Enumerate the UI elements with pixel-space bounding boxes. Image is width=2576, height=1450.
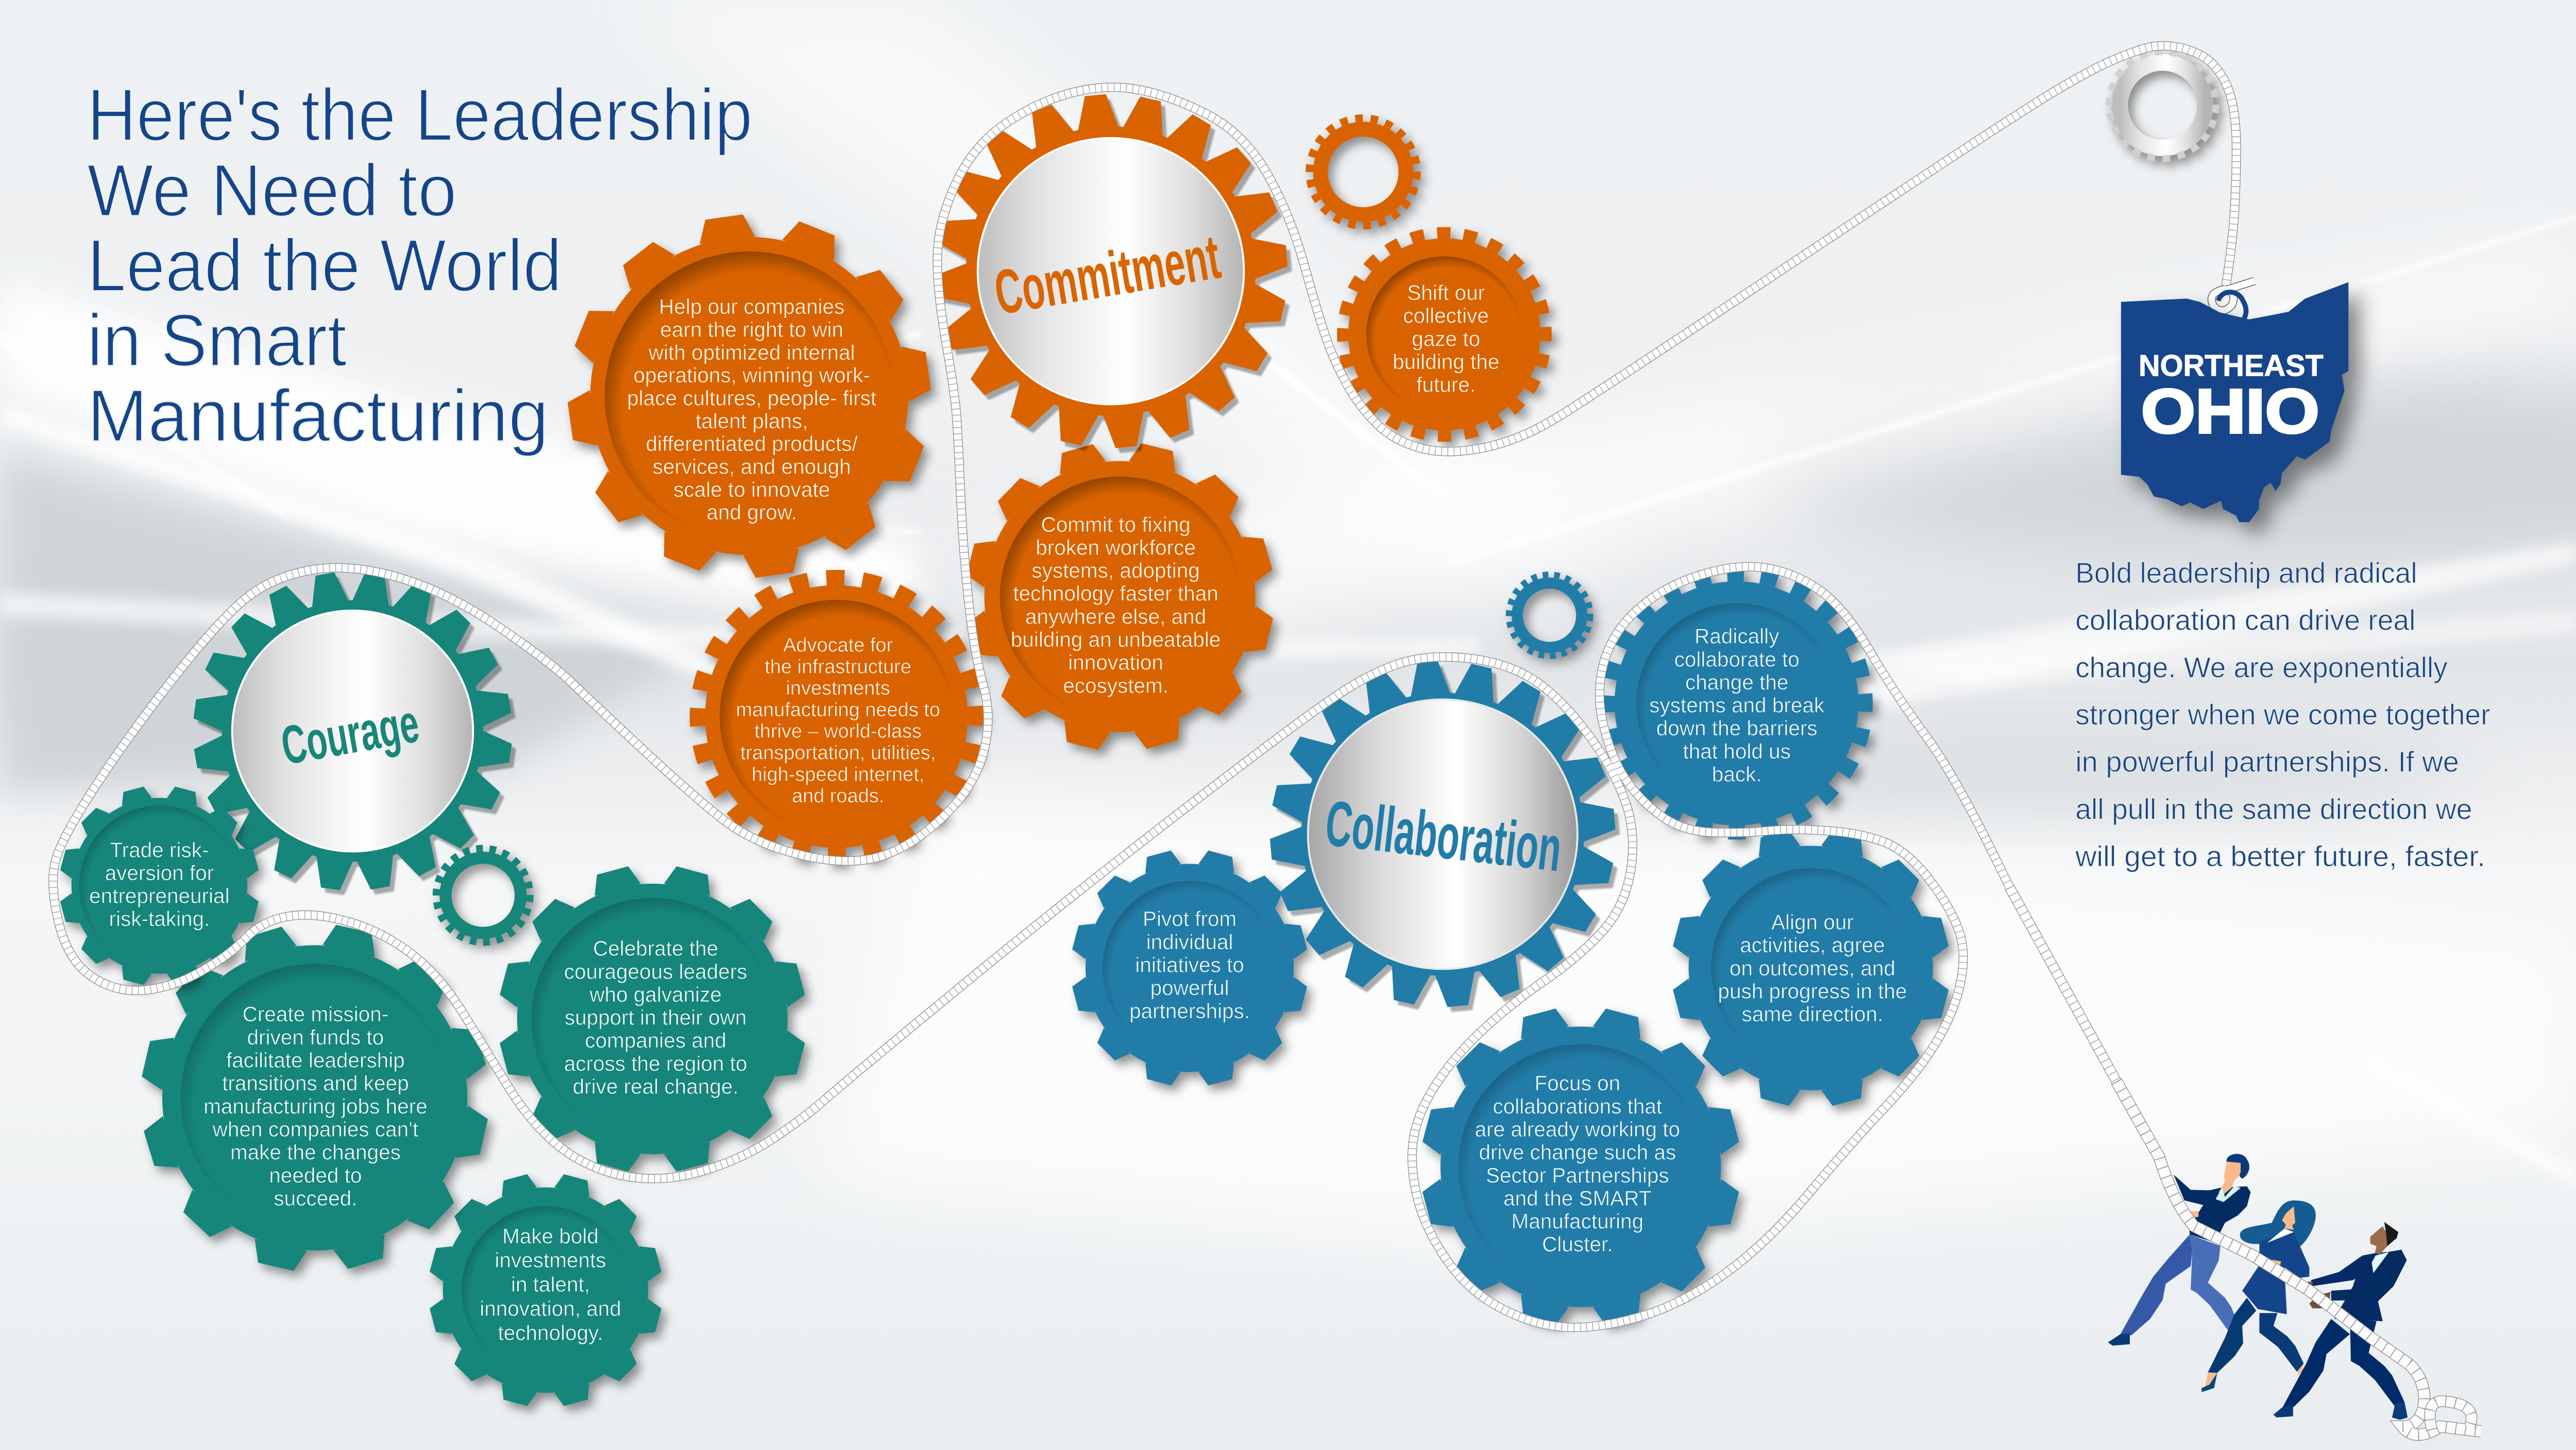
gear: collaboration [1256,647,1630,1021]
text: trade: entrepreneurial [89,884,230,908]
paragraph: change. We are exponentially [2075,651,2448,683]
pulley silver ring [2109,52,2216,159]
text: make bold: technology. [498,1321,603,1344]
text: focus: collaborations that [1493,1094,1662,1118]
text: help our companies: Help our companies [659,295,844,318]
title: Here's the Leadership [87,74,753,156]
text: celebrate: drive real change. [573,1075,739,1099]
panel: courage gears [37,551,840,1433]
text: radically: Radically [1694,625,1780,648]
text: focus: Manufacturing [1512,1209,1643,1233]
gear: pivot [1045,823,1334,1113]
Ohio shape [2121,282,2348,522]
paragraph: all pull in the same direction we [2075,793,2472,825]
text: trade: risk-taking. [109,907,210,931]
text: pivot [1129,907,1250,1023]
text: trade: aversion for [105,861,214,885]
text: shift: future. [1416,373,1476,397]
gear: courage [173,551,533,911]
gear: shift [1336,227,1552,442]
text: pivot: initiatives to [1135,953,1244,977]
text: align: Align our [1771,911,1854,934]
heading: Commitment: Commitment [990,221,1225,328]
title: We Need to [87,149,457,232]
paragraph: stronger when we come together [2075,699,2490,731]
panel: commitment gears [545,80,1552,864]
text: shift: building the [1393,350,1499,374]
text: help our companies: services, and enough [653,455,851,479]
text: focus: drive change such as [1479,1140,1676,1164]
inset: focus [1458,1044,1703,1289]
text: help our companies [627,295,876,524]
text: help our companies: scale to innovate [673,478,830,501]
text: advocate: the infrastructure [765,656,911,678]
text: radically [1649,625,1825,786]
paragraph: will get to a better future, faster. [2075,840,2485,872]
text: create [204,1002,428,1210]
text: focus: Cluster. [1542,1233,1613,1256]
gear: advocate [689,569,984,864]
figure: man left [2108,1154,2250,1345]
text: help our companies: place cultures, people- first [627,386,876,410]
text: create: make the changes [230,1140,401,1164]
text: commit: broken workforce [1036,535,1196,559]
paragraph: Bold leadership and radical [2075,557,2417,589]
text: advocate: and roads. [792,785,884,807]
text: create: when companies can't [212,1117,418,1141]
text: trade [89,838,230,931]
text: trade: Trade risk- [110,838,209,862]
text: help our companies: talent plans, [696,409,808,433]
text: radically: change the [1685,670,1788,694]
text: make bold: investments [495,1249,606,1272]
text: advocate: manufacturing needs to [736,699,940,721]
text: commit: innovation [1068,651,1163,675]
text: celebrate: Celebrate the [593,937,718,960]
text: advocate: thrive – world-class [754,721,922,743]
gear: commit [933,410,1307,783]
text: celebrate: who galvanize [589,983,722,1006]
text: commit [1011,513,1221,697]
text: make bold [480,1224,621,1344]
text: focus: are already working to [1475,1117,1680,1141]
text: pivot: individual [1146,930,1233,954]
text: radically: systems and break [1649,694,1825,717]
text: create: driven funds to [247,1025,384,1049]
text: align: push progress in the [1718,980,1907,1003]
text: advocate: investments [786,678,890,699]
text: celebrate: across the region to [564,1052,747,1075]
silver disc: collaboration [1308,699,1578,969]
text: commit: technology faster than [1013,582,1218,605]
title [87,74,753,457]
paragraph: in powerful partnerships. If we [2075,746,2459,778]
text: radically: back. [1712,763,1762,786]
gear: make bold [403,1147,688,1433]
text: create: Create mission- [243,1002,388,1026]
gear: align [1641,798,1981,1138]
text: radically: collaborate to [1674,647,1800,671]
title: Manufacturing [87,375,549,457]
text: radically: that hold us [1683,739,1791,763]
inset: align [1711,868,1910,1068]
inset: pivot [1103,881,1277,1055]
text: focus: Sector Partnerships [1486,1164,1669,1187]
text: commit: ecosystem. [1063,673,1168,697]
text: pivot: powerful [1150,976,1229,1000]
text: shift: collective [1403,304,1489,328]
text: create: needed to [269,1164,362,1187]
text: celebrate: support in their own [565,1006,747,1030]
rope [53,46,2236,1327]
text: commit: building an unbeatable [1011,628,1221,651]
title: in Smart [87,299,347,382]
gear: help our companies [545,192,954,600]
heading: Courage: Courage [277,693,423,777]
text: align [1718,911,1907,1026]
paragraph [2075,557,2490,872]
text: focus: and the SMART [1503,1186,1652,1210]
text: create: manufacturing jobs here [204,1094,428,1118]
text: advocate: high-speed internet, [752,764,924,785]
text: shift [1393,281,1499,397]
small ring gear teal [436,849,530,942]
logo: Northeast Ohio [2121,282,2348,522]
text: help our companies: and grow. [706,500,797,524]
text: shift: Shift our [1407,281,1485,305]
silver disc: commitment [978,138,1244,404]
gear: create [107,890,523,1306]
inset: shift [1366,257,1522,413]
silver disc: courage [232,611,473,851]
gear: celebrate [464,831,840,1207]
text: focus [1475,1071,1680,1256]
text: help our companies: operations, winning work- [634,363,870,387]
gear: trade [37,764,282,1008]
inset: make bold [462,1206,630,1374]
text: celebrate [564,937,747,1099]
text: focus: Focus on [1535,1071,1620,1095]
inset: help [605,251,894,541]
text: advocate [736,635,940,807]
inset: advocate [720,600,953,833]
text: make bold: in talent, [511,1273,590,1296]
text: create: transitions and keep [222,1071,409,1095]
inset: celebrate [531,898,773,1140]
hook [2218,292,2246,321]
text: pivot: partnerships. [1129,999,1250,1023]
title: Lead the World [87,225,562,307]
gear: commitment [920,80,1302,463]
inset: commit [1000,477,1240,717]
text: commit: anywhere else, and [1025,604,1206,628]
text: align: on outcomes, and [1730,956,1895,980]
text: commit: systems, adopting [1031,559,1200,582]
rope knot at Ohio [2212,281,2255,311]
text: help our companies: differentiated products/ [646,432,858,456]
figure: woman [2201,1201,2316,1392]
figure: man right [2274,1222,2408,1420]
inset: create [181,964,449,1232]
text: create: facilitate leadership [226,1049,405,1072]
NORTHEAST: NORTHEAST [2139,349,2324,382]
text: celebrate: companies and [585,1029,726,1052]
text: make bold: Make bold [502,1224,599,1248]
inset: radically [1636,603,1837,804]
text: pivot: Pivot from [1143,907,1236,931]
text: shift: gaze to [1412,327,1480,350]
text: radically: down the barriers [1656,716,1818,740]
text: celebrate: courageous leaders [564,959,747,983]
text: create: succeed. [274,1186,357,1210]
OHIO: OHIO [2141,376,2319,446]
paragraph: collaboration can drive real [2075,604,2415,636]
panel: collaboration gears [1045,566,1981,1362]
text: commit: Commit to fixing [1041,513,1191,536]
small ring gear blue [1509,575,1590,656]
small ring gear orange [1310,119,1417,225]
text: align: same direction. [1742,1002,1883,1026]
gear: radically [1600,566,1873,840]
heading: Collaboration: Collaboration [1322,787,1565,885]
headings on silver discs [277,221,1565,885]
inset: trade [79,805,240,966]
text: make bold: innovation, and [480,1296,621,1320]
text: advocate: Advocate for [783,635,893,656]
text: align: activities, agree [1740,933,1885,957]
figures pulling rope [2108,1154,2408,1420]
text: advocate: transportation, utilities, [740,742,936,764]
gear: focus [1385,972,1776,1362]
text: help our companies: with optimized internal [648,341,855,364]
rope held by figures with coil [2116,1082,2481,1435]
text: help our companies: earn the right to win [660,318,843,342]
